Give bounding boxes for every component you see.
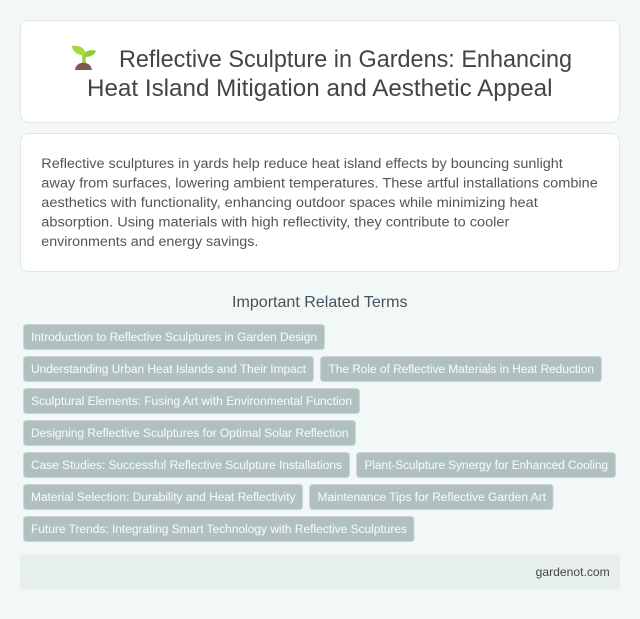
description text <box>41 156 598 250</box>
title panel <box>20 20 620 122</box>
tag: Maintenance Tips for Reflective Garden Art <box>318 490 547 504</box>
title text <box>87 46 572 102</box>
tag <box>24 420 356 446</box>
footer source text: gardenot.com <box>536 565 610 579</box>
title text: Reflective Sculpture in Gardens: Enhancing <box>119 46 572 73</box>
footer bar <box>20 555 620 589</box>
tag: Introduction to Reflective Sculptures in Garden Design <box>31 330 317 344</box>
tag: Plant-Sculpture Synergy for Enhanced Cooling <box>364 458 608 472</box>
description text: away from surfaces, lowering ambient temperatures. These artful installations combine <box>41 176 598 192</box>
tag <box>320 356 602 382</box>
tag: Designing Reflective Sculptures for Optimal Solar Reflection <box>31 426 349 440</box>
tag <box>24 452 350 478</box>
tag: Future Trends: Integrating Smart Technology with Reflective Sculptures <box>31 522 407 536</box>
tag: Understanding Urban Heat Islands and Their Impact <box>31 362 307 376</box>
description text: absorption. Using materials with high reflectivity, they contribute to cooler <box>41 214 510 230</box>
tag: The Role of Reflective Materials in Heat Reduction <box>328 362 594 376</box>
description text: environments and energy savings. <box>41 234 258 250</box>
tag: Sculptural Elements: Fusing Art with Environmental Function <box>31 394 352 408</box>
description text: aesthetics with functionality, enhancing outdoor spaces while minimizing heat <box>41 195 538 211</box>
tag <box>24 324 324 350</box>
tag: Case Studies: Successful Reflective Sculpture Installations <box>31 458 342 472</box>
heading: important related terms: Important Related Terms <box>232 294 408 311</box>
tag <box>24 484 302 510</box>
tag <box>24 388 360 414</box>
icon: seedling <box>72 46 96 70</box>
description text: Reflective sculptures in yards help reduce heat island effects by bouncing sunlight <box>41 156 563 172</box>
tag <box>356 452 616 478</box>
tag <box>24 516 414 542</box>
tag: Material Selection: Durability and Heat Reflectivity <box>31 490 296 504</box>
related terms tags <box>24 324 616 542</box>
tag <box>24 356 314 382</box>
tag <box>310 484 553 510</box>
description panel <box>20 134 620 272</box>
title text: Heat Island Mitigation and Aesthetic Appeal <box>87 75 552 102</box>
